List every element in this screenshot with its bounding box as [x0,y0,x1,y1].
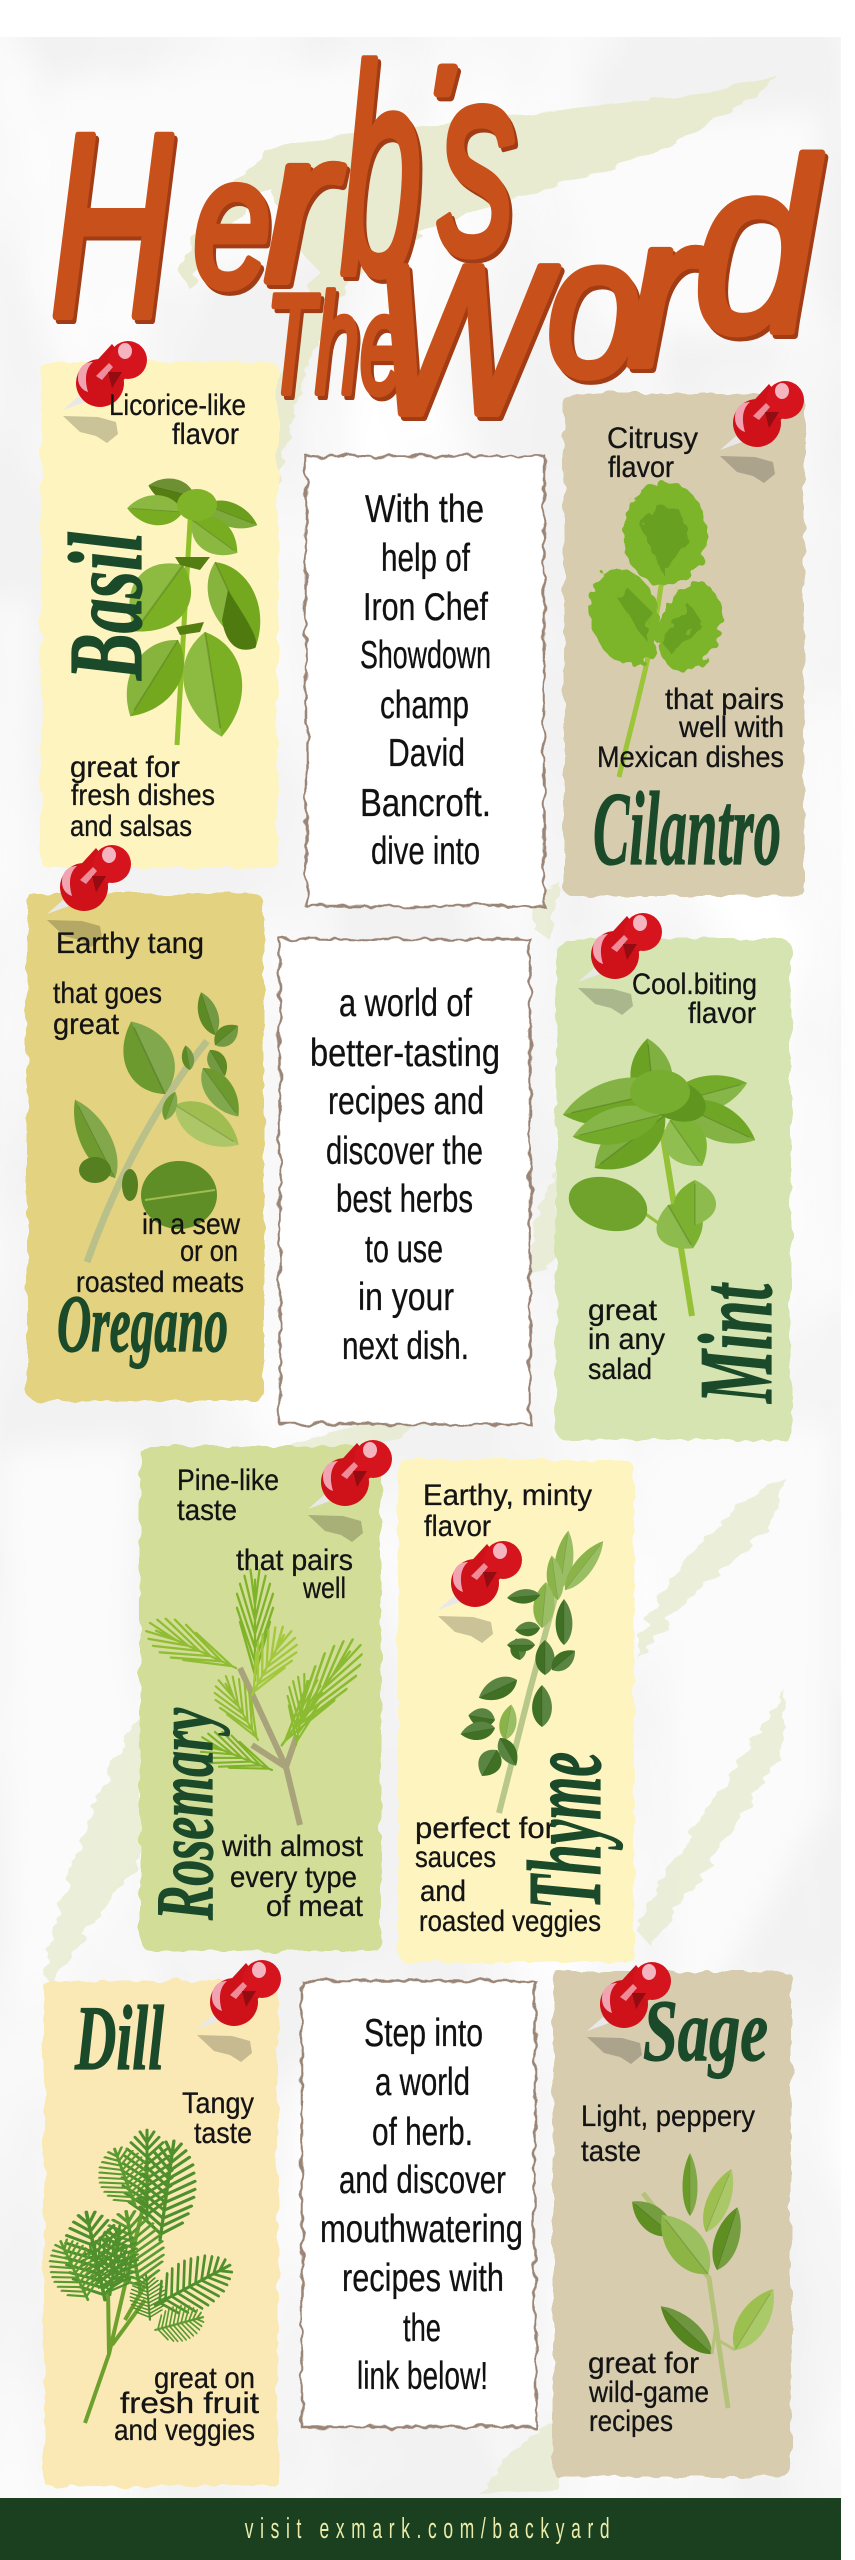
text: with almost every type of meat: every type [230,1861,357,1894]
panel: sage [553,1962,791,2477]
text block: recipes and [328,1080,484,1123]
text block: champ [380,684,469,727]
text: Light, peppery taste: Light, peppery [581,2100,755,2133]
text: great on fresh fruit and veggies [114,2362,260,2447]
text: that pairs well [236,1544,353,1605]
text: great for wild-game recipes: recipes [589,2405,673,2438]
text: great in any salad [588,1294,665,1386]
text: great for wild-game recipes: great for [588,2347,699,2380]
pin [63,341,147,443]
text: perfect for sauces and roasted veggies [415,1812,601,1938]
title line: Herb's: s [438,7,516,311]
card: closing text [302,1981,535,2427]
pin [197,1960,281,2062]
text: Tangy taste: taste [194,2117,252,2150]
text block: link below! [357,2355,488,2398]
pin [438,1541,522,1643]
text: perfect for sauces and roasted veggies: sauces [415,1841,496,1874]
text block: a world of [339,982,472,1025]
text: great for fresh dishes and salsas: fresh dishes [71,779,215,812]
text: with almost every type of meat: with almost [221,1830,364,1863]
text: great in any salad: in any [588,1323,665,1356]
name: Oregano: Oregano [57,1278,228,1369]
panel: dill [40,1960,281,2486]
text block: of herb. [372,2111,473,2154]
pin [587,1962,671,2064]
text block: dive into [371,830,480,873]
text block: in your [358,1276,454,1319]
illustration: mint sprig [558,1036,763,1316]
text: great for fresh dishes and salsas: great for [70,751,180,784]
text: Pine-like taste: taste [177,1494,237,1527]
text: Cool, biting flavor [632,968,757,1030]
text: that pairs well: well [302,1572,346,1605]
text: in a sew or on roasted meats: or on [180,1235,238,1268]
text block: discover the [326,1130,483,1173]
panel: oregano [27,845,264,1401]
text: Cool, biting flavor: Cool.biting [632,968,757,1001]
text: that pairs well with Mexican dishes [597,683,784,774]
illustration: sage sprig [624,2153,785,2408]
text block: David [388,732,465,775]
panel: basil [41,341,278,868]
name: Basil: Basil [47,531,164,681]
title line: Herb's: e [193,119,271,326]
text: great in any salad: salad [588,1353,652,1386]
text: in a sew or on roasted meats [76,1208,244,1299]
text block: best herbs [336,1178,473,1221]
text: great for fresh dishes and salsas [70,751,215,843]
text: Tangy taste [182,2087,254,2150]
text: great on fresh fruit and veggies: great on [154,2362,255,2395]
text: Earthy tang that goes great: that goes [53,977,162,1010]
footer bar [0,2498,841,2560]
name: Dill: Dill [74,1987,164,2089]
text block: Step into [364,2012,483,2055]
text block [320,2012,523,2398]
text: Cool, biting flavor: flavor [688,997,756,1030]
illustration: rosemary sprig [141,1570,372,1825]
text block [360,488,491,873]
text: Earthy tang that goes great [53,927,204,1041]
title line: Word: d [694,109,822,383]
text: great for wild-game recipes: wild-game [588,2376,709,2409]
title line: Herb's: H [50,79,174,372]
text: perfect for sauces and roasted veggies: and [420,1875,466,1908]
name: Mint: Mint [677,1282,794,1404]
text: Pine-like taste [177,1464,279,1527]
text block: recipes with [342,2257,504,2300]
text: Tangy taste: Tangy [182,2087,254,2120]
text block: better-tasting [310,1032,500,1075]
panel: cilantro [564,381,804,896]
name: Thyme: Thyme [506,1752,623,1909]
text: Citrusy flavor: Citrusy [607,422,698,455]
pin [578,913,662,1015]
text: Earthy tang that goes great: great [53,1008,120,1041]
text: great on fresh fruit and veggies: and veggies [114,2414,255,2447]
name: Rosemary: Rosemary [139,1708,230,1921]
text block: Bancroft. [360,782,491,825]
text: that pairs well with Mexican dishes: well with [678,711,784,744]
pin [47,845,131,947]
pin [720,381,804,483]
text block: Iron Chef [363,586,488,629]
title line: Word: W [373,221,558,458]
card: intro text 1 [306,456,544,906]
text: in a sew or on roasted meats: roasted meats [76,1266,244,1299]
text block: With the [365,488,484,531]
text: great in any salad: great [588,1294,658,1327]
title line: Word: o [547,196,641,417]
text: great on fresh fruit and veggies: fresh fruit [120,2387,260,2420]
text block: next dish. [342,1325,469,1368]
text: in a sew or on roasted meats: in a sew [142,1208,240,1241]
text: great for fresh dishes and salsas: and salsas [70,810,192,843]
illustration: basil sprig [110,473,276,745]
title line: Herb's: ' [425,42,454,176]
text block: mouthwatering [320,2208,523,2251]
text block: a world [375,2061,470,2104]
illustration: oregano sprig [62,989,249,1262]
illustration: dill sprig [40,2130,242,2423]
title line: Herb's: r [264,85,344,327]
text: Licorice-like flavor [109,389,246,451]
text: Citrusy flavor [607,422,698,484]
text: with almost every type of meat [221,1830,364,1923]
text: Citrusy flavor: flavor [608,451,674,484]
text: that pairs well with Mexican dishes: Mexican dishes [597,741,784,774]
text: Licorice-like flavor: flavor [172,418,239,451]
text: perfect for sauces and roasted veggies: roasted veggies [419,1905,601,1938]
text: that pairs well: that pairs [236,1544,353,1577]
name: Sage: Sage [643,1983,768,2080]
text block: and discover [339,2159,506,2202]
panel: thyme [398,1460,634,1962]
footer link text: visit exmark.com/backyard [245,2513,610,2545]
text: Earthy tang that goes great: Earthy tang [56,927,204,960]
title line: Herb's: b [340,6,422,336]
text: Earthy, minty flavor [423,1479,592,1543]
text: Licorice-like flavor: Licorice-like [109,389,246,422]
illustration: thyme sprig [459,1529,610,1813]
panel: rosemary [139,1440,392,1951]
text: perfect for sauces and roasted veggies: perfect for [415,1812,555,1845]
text: Earthy, minty flavor: flavor [424,1510,491,1543]
text block: to use [365,1228,443,1271]
text: great for wild-game recipes [588,2347,709,2438]
text block: help of [381,537,470,580]
panel: mint [556,913,794,1440]
text: Light, peppery taste [581,2100,755,2168]
text: that pairs well with Mexican dishes: that pairs [665,683,784,716]
text block: the [403,2307,441,2350]
text: Light, peppery taste: taste [581,2135,641,2168]
title: Herb's The Word [50,6,822,458]
text: Earthy, minty flavor: Earthy, minty [423,1479,592,1512]
text block: Showdown [360,634,491,677]
text block [310,982,500,1368]
card: intro text 2 [280,939,530,1424]
title line: Word: r [627,169,706,411]
text: with almost every type of meat: of meat [266,1890,364,1923]
pin [308,1440,392,1542]
text: Pine-like taste: Pine-like [177,1464,279,1497]
illustration: cilantro sprig [579,482,731,777]
title line: The: The [266,265,404,424]
